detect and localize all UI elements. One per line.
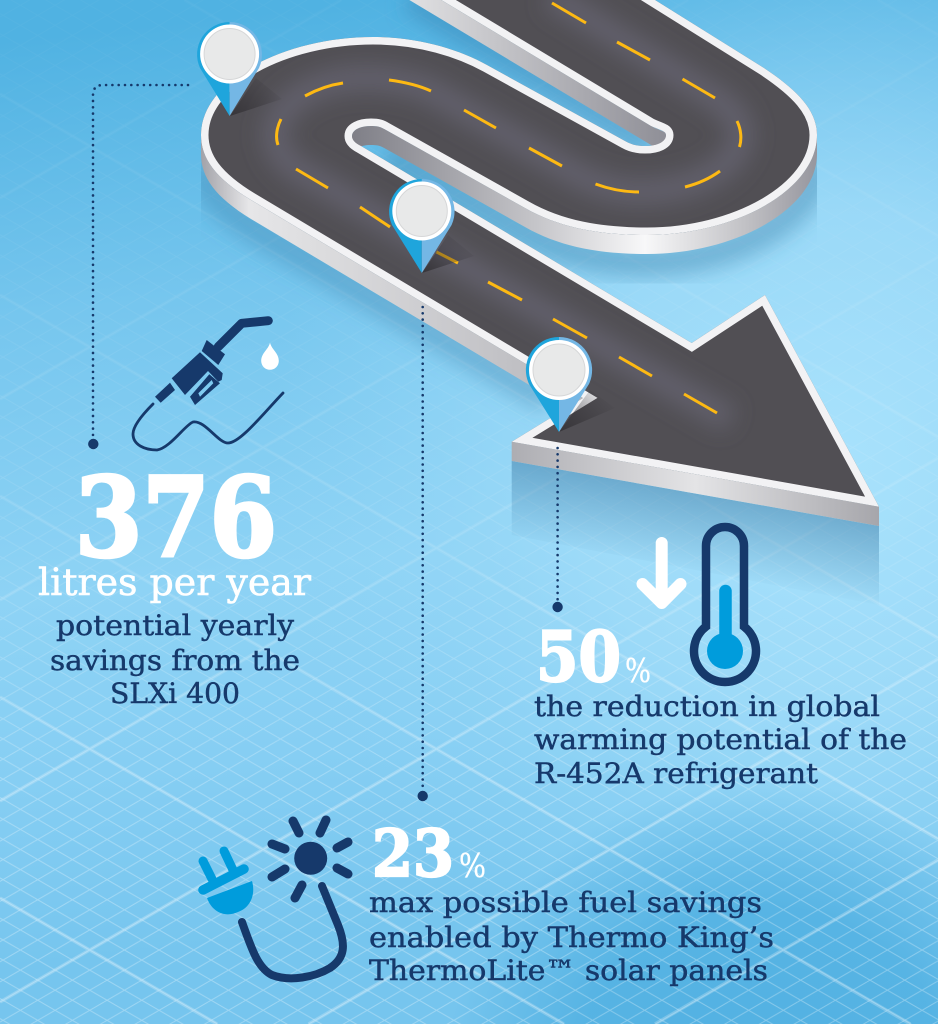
map pin 3 <box>526 337 615 432</box>
road white edge <box>201 0 879 507</box>
map pin 1 <box>197 22 282 116</box>
icon: fuel nozzle <box>133 321 283 450</box>
road centre highlight <box>275 0 741 420</box>
road wall: hairpin and lower curve <box>352 126 817 254</box>
stat: 376 litres per year: litres per year <box>38 561 311 604</box>
stat: 376 litres per year: SLXi 400 <box>110 677 240 710</box>
stat: 50% refrigerant: warming potential of the <box>534 723 907 756</box>
stat: 50% refrigerant: 50 <box>536 617 621 698</box>
icon: down arrow <box>642 543 680 603</box>
road yellow dashes <box>277 3 741 413</box>
road shadows <box>201 0 879 605</box>
stat: 50% refrigerant <box>534 617 907 790</box>
stat: 376 litres per year: 376 <box>75 453 277 582</box>
map pin 2 <box>389 179 474 273</box>
road wall: left side <box>201 135 583 417</box>
stat: 23% solar: ThermoLite™ solar panels <box>369 954 768 987</box>
stat: 376 litres per year <box>38 453 311 710</box>
icon: thermometer <box>694 527 756 682</box>
stat: 50% refrigerant: the reduction in global <box>534 690 880 723</box>
stat: 23% solar: % <box>459 846 486 885</box>
plug <box>203 851 253 914</box>
dotted leader line: refrigerant <box>552 448 563 612</box>
stat: 23% solar <box>369 816 774 987</box>
winding road arrow <box>201 0 879 526</box>
icon: solar plug <box>203 820 348 978</box>
stat: 50% refrigerant: R-452A refrigerant <box>534 757 819 790</box>
dotted leader line: solar <box>418 307 428 801</box>
sun <box>272 820 348 898</box>
stat: 23% solar: max possible fuel savings <box>369 886 762 919</box>
dotted leader line: fuel <box>88 85 188 449</box>
icon: fuel drop <box>261 343 279 370</box>
cord <box>242 886 343 978</box>
road wall: upper slot <box>376 0 666 154</box>
road surface <box>201 0 879 507</box>
stat: 23% solar: 23 <box>372 816 454 892</box>
road wall: arrow head <box>512 442 879 526</box>
stat: 376 litres per year: savings from the <box>50 644 300 677</box>
stat: 50% refrigerant: % <box>625 651 651 690</box>
stat: 376 litres per year: potential yearly <box>56 609 294 642</box>
stat: 23% solar: enabled by Thermo King’s <box>369 921 774 954</box>
